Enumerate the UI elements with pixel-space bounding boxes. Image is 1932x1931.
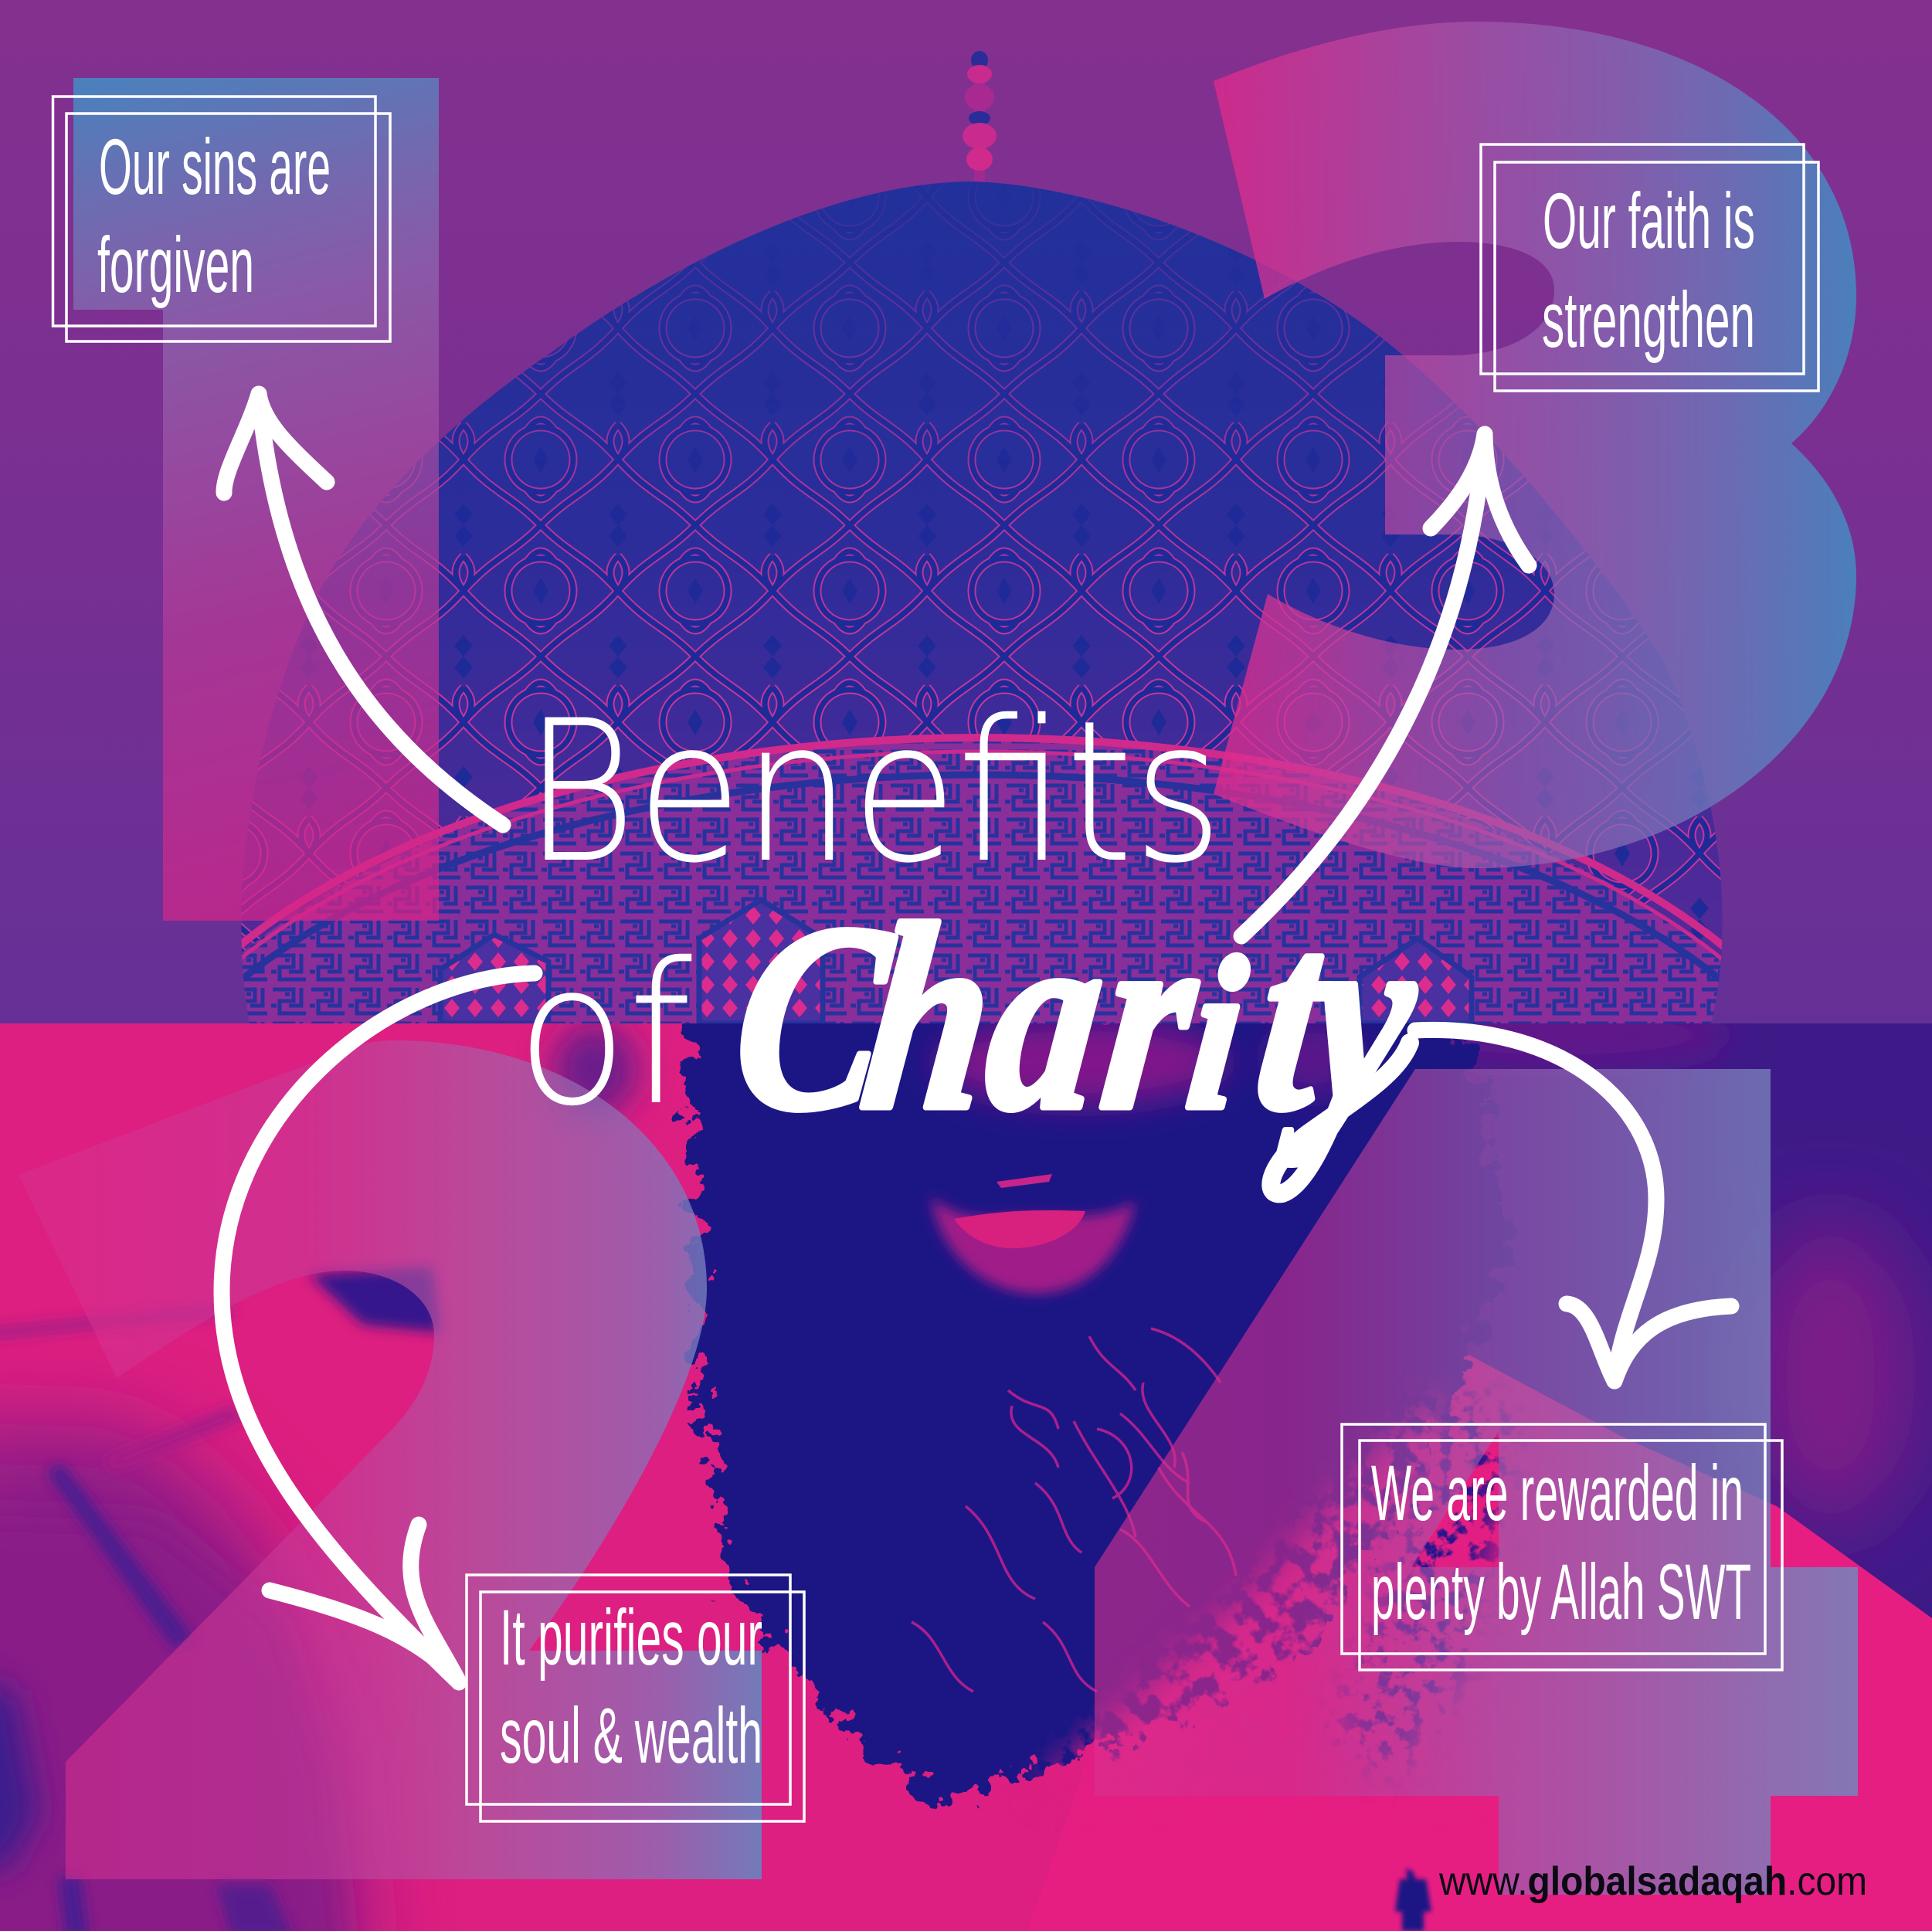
title: Benefits of: Benefits (524, 678, 1223, 906)
beard texture speckles (1035, 1390, 1514, 1792)
shoulder (1027, 1298, 1932, 1931)
title: Charity: ty (1244, 870, 1431, 1165)
title: Benefits of (516, 678, 1223, 1149)
box 4: we are rewarded in plenty (1342, 1424, 1782, 1670)
dome body (193, 170, 1777, 1027)
digit 2 (19, 1040, 762, 1879)
arrow: centre to box 2 (222, 973, 535, 1682)
beard hairs (912, 1329, 1236, 1692)
box 2: it purifies our soul and wealth: It purifies our (500, 1593, 762, 1682)
lower photo: man with beard (0, 1004, 1932, 1931)
box 1: our sins are forgiven (53, 97, 390, 341)
digit 3 (1214, 22, 1856, 868)
lips (931, 1174, 1136, 1294)
title: Benefits of: of (516, 921, 692, 1149)
arrow: centre to box 3 (1241, 434, 1529, 936)
box 3: our faith is strengthen: Our faith is (1543, 177, 1755, 265)
box 2: it purifies our soul and wealth: soul & wealth (500, 1692, 762, 1780)
swash: tail of y (1271, 1043, 1410, 1193)
beard (680, 1004, 1514, 1804)
title: Charity: i (1178, 913, 1256, 1155)
digit 4 (1095, 1069, 1858, 1895)
box 1: our sins are forgiven: forgiven (97, 221, 254, 309)
arrow: centre to box 1 (224, 394, 503, 825)
website url: www.globalsadaqah.com (1438, 1859, 1867, 1904)
title: Charity: Char (722, 870, 1214, 1165)
title: Charity (722, 870, 1431, 1193)
turban folds (0, 1023, 637, 1931)
forehead patches (935, 1020, 1228, 1105)
box 1: our sins are forgiven: Our sins are (99, 123, 331, 211)
box 2: it purifies our soul and wealth (467, 1575, 804, 1821)
arrow: centre to box 4 (1415, 1030, 1731, 1381)
box 3: our faith is strengthen (1481, 144, 1818, 391)
box 3: our faith is strengthen: strengthen (1542, 276, 1755, 364)
digit 1 (73, 78, 439, 921)
dome band (193, 734, 1769, 1027)
small figure (1395, 1869, 1431, 1931)
dome photo (193, 51, 1777, 1027)
upper background (0, 0, 1932, 1023)
dome finial (963, 51, 997, 185)
dark right background (1451, 1023, 1932, 1618)
